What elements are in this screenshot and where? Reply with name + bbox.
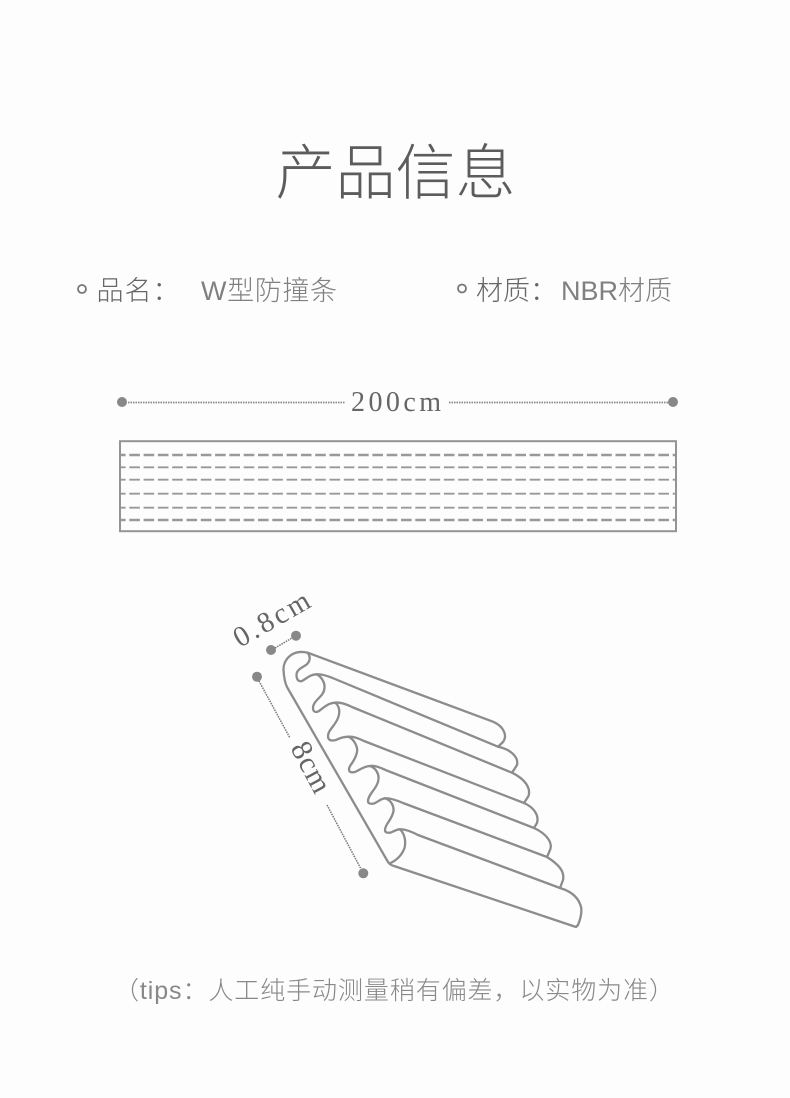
strip cross-section drawing	[283, 652, 581, 927]
width label: 8cm	[284, 736, 339, 800]
length dimension: 200cm	[117, 387, 678, 418]
name value: W型防撞条	[201, 276, 337, 306]
thickness label: 0.8cm	[228, 583, 319, 654]
name label: 品名：	[96, 276, 180, 306]
thickness dimension: 0.8cm	[228, 583, 319, 655]
tips note: （tips：人工纯手动测量稍有偏差，以实物为准）	[114, 977, 674, 1005]
icon: name bullet	[78, 285, 86, 293]
material label: 材质：	[476, 276, 557, 306]
top view strip with dashed ridges	[120, 441, 676, 531]
wavy front profile	[296, 653, 405, 863]
product name spec	[78, 276, 337, 306]
outer outline	[283, 652, 581, 927]
material value: NBR材质	[561, 276, 672, 306]
icon: material bullet	[458, 284, 466, 292]
ridge lines	[308, 653, 505, 747]
title: 产品信息	[276, 140, 516, 207]
width dimension: 8cm	[252, 672, 368, 878]
length label: 200cm	[351, 387, 441, 418]
material spec	[458, 276, 672, 306]
